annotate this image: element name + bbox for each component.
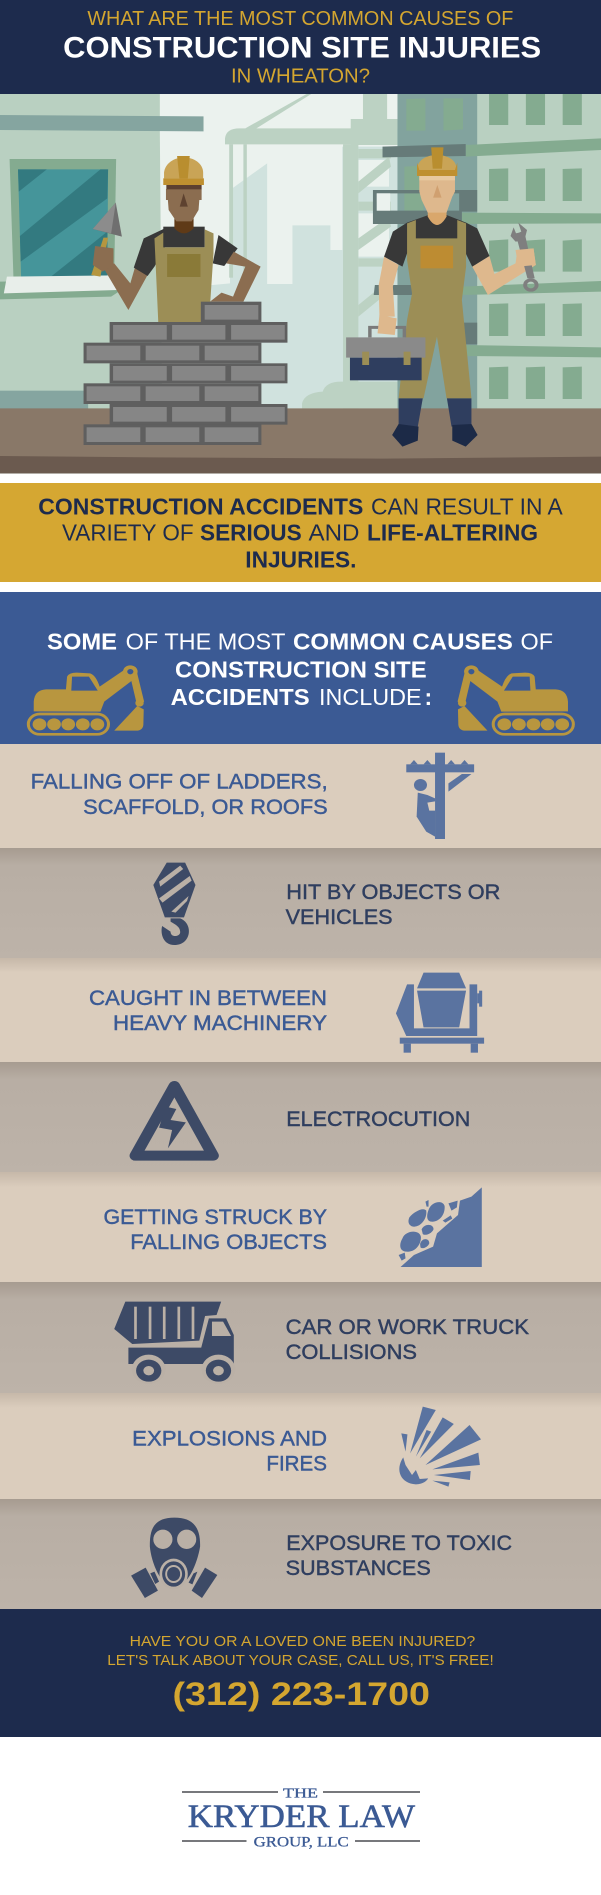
row 6 text: CAR OR WORK TRUCK xyxy=(286,1315,530,1339)
footer call to action panel xyxy=(0,1609,601,1737)
main title: CONSTRUCTION SITE INJURIES xyxy=(63,31,541,64)
worker 1: bricklayer xyxy=(91,156,261,323)
row 2 text: VEHICLES xyxy=(286,905,393,929)
intro text: VARIETY OF xyxy=(62,520,194,546)
row 6: truck collisions xyxy=(0,1282,601,1393)
worker 2: man with toolbox and wrench xyxy=(346,147,537,447)
row 5 text: GETTING STRUCK BY xyxy=(104,1205,327,1229)
heading line 3: IN WHEATON? xyxy=(231,66,370,88)
causes heading text: OF THE MOST xyxy=(126,628,286,654)
row 1 text xyxy=(31,769,328,819)
icon: rockslide xyxy=(399,1187,482,1267)
row 8 text xyxy=(286,1531,512,1580)
logo: The Kryder Law Group, LLC xyxy=(182,1786,420,1851)
row 5 text: FALLING OBJECTS xyxy=(130,1230,327,1254)
icon: excavator right xyxy=(458,665,573,734)
icon: gas mask xyxy=(131,1518,217,1598)
row 1: falling xyxy=(0,744,601,848)
logo: The Kryder Law Group, LLC: KRYDER LAW xyxy=(188,1799,416,1835)
row 4 text: ELECTROCUTION xyxy=(286,1107,470,1131)
intro text xyxy=(38,493,563,573)
illustration: construction workers at building site xyxy=(0,94,601,474)
causes heading text: : xyxy=(424,684,432,710)
logo: The Kryder Law Group, LLC: GROUP, LLC xyxy=(254,1835,349,1851)
call to action text: HAVE YOU OR A LOVED ONE BEEN INJURED? xyxy=(130,1633,475,1650)
intro text: CAN RESULT IN A xyxy=(371,493,563,519)
heading line 1: WHAT ARE THE MOST COMMON CAUSES OF xyxy=(87,8,513,30)
row 8 text: EXPOSURE TO TOXIC xyxy=(286,1531,512,1555)
logo: The Kryder Law Group, LLC: THE xyxy=(283,1786,318,1801)
row 3 text: HEAVY MACHINERY xyxy=(113,1011,327,1035)
row 6 text xyxy=(286,1315,530,1364)
row 2: hit by objects xyxy=(0,848,601,958)
intro text: LIFE-ALTERING xyxy=(367,520,538,546)
row 7 text: EXPLOSIONS AND xyxy=(132,1427,327,1451)
brick wall xyxy=(84,302,287,445)
row 1 text: FALLING OFF OF LADDERS, xyxy=(31,769,328,793)
row 1 text: SCAFFOLD, OR ROOFS xyxy=(83,795,328,819)
intro text: AND xyxy=(308,520,360,546)
row 6 text: COLLISIONS xyxy=(286,1340,417,1364)
row 4: electrocution xyxy=(0,1062,601,1172)
row 3 text: CAUGHT IN BETWEEN xyxy=(89,986,327,1010)
row 7: explosions and fires xyxy=(0,1393,601,1499)
icon: dump truck xyxy=(114,1302,235,1384)
intro band xyxy=(0,483,601,582)
row 7 text xyxy=(132,1427,327,1476)
row 8: toxic substances xyxy=(0,1499,601,1609)
row 7 text: FIRES xyxy=(266,1452,327,1476)
header panel xyxy=(0,0,601,94)
causes heading text: CONSTRUCTION SITE xyxy=(175,656,427,682)
causes heading text: OF xyxy=(520,628,553,654)
causes heading text: SOME xyxy=(47,628,117,654)
row 2 text: HIT BY OBJECTS OR xyxy=(286,880,500,904)
phone number: (312) 223-1700 xyxy=(172,1676,430,1712)
icon: crane hook xyxy=(153,863,195,945)
icon: utility pole climber xyxy=(406,753,474,839)
causes heading text xyxy=(47,628,553,710)
icon: high voltage warning triangle xyxy=(135,1086,213,1156)
blue causes heading panel xyxy=(0,592,601,744)
intro text: CONSTRUCTION ACCIDENTS xyxy=(38,493,363,519)
intro text: INJURIES. xyxy=(245,547,356,573)
row 3: caught in machinery xyxy=(0,958,601,1062)
row 3 text xyxy=(89,986,327,1035)
icon: explosion xyxy=(399,1407,481,1487)
causes heading text: INCLUDE xyxy=(319,684,422,710)
call to action text line 2: LET'S TALK ABOUT YOUR CASE, CALL US, IT'S FREE! xyxy=(107,1652,494,1669)
causes heading text: ACCIDENTS xyxy=(171,684,310,710)
icon: cement mixer xyxy=(396,973,484,1053)
row 5: struck by falling objects xyxy=(0,1172,601,1282)
row 5 text xyxy=(104,1205,327,1254)
icon: excavator left xyxy=(28,665,144,734)
causes heading text: COMMON CAUSES xyxy=(293,628,513,654)
intro text: SERIOUS xyxy=(200,520,302,546)
row 8 text: SUBSTANCES xyxy=(286,1556,431,1580)
row 2 text xyxy=(286,880,500,929)
